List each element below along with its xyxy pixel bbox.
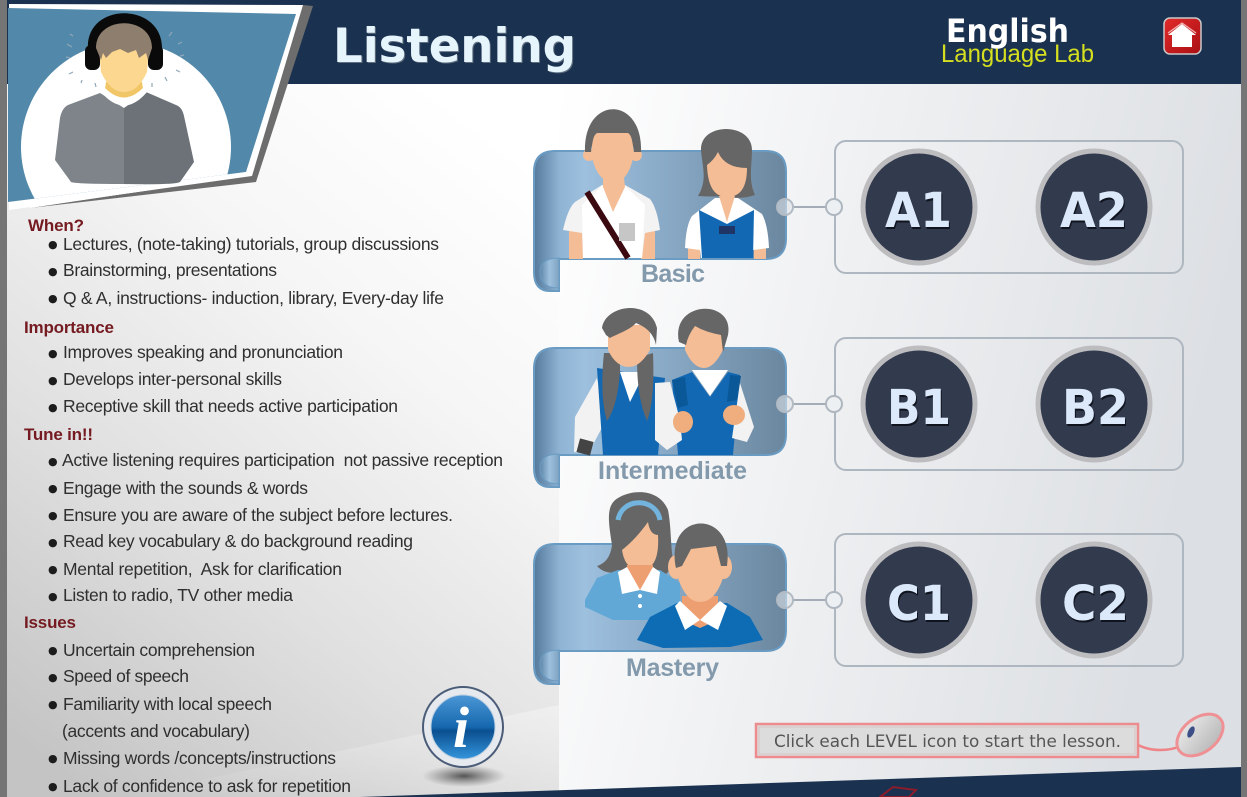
box: B levels	[826, 338, 1183, 470]
collar	[101, 88, 147, 106]
text block: when: Q & A, instructions- induction, library, Every-day life	[63, 288, 444, 308]
callout: click instruction: Click each LEVEL icon to start the lesson.	[774, 732, 1121, 752]
figure: girl	[574, 308, 665, 456]
panel: intermediate level	[534, 308, 1183, 487]
blue backdrop	[8, 8, 296, 202]
callout: click instruction	[756, 724, 1138, 757]
text block: importance	[24, 318, 398, 416]
label: Basic	[641, 260, 705, 288]
text block: tune in: Mental repetition, Ask for clarification	[63, 559, 342, 579]
torso	[55, 93, 124, 184]
box: A levels	[826, 141, 1183, 273]
logo: English Language Lab	[941, 12, 1094, 68]
text block: tune in: Tune in!!	[24, 425, 93, 444]
box: A levels: A1	[885, 183, 952, 239]
panel: mastery level	[534, 492, 1183, 684]
connector	[777, 396, 826, 412]
box: A levels: A2	[1060, 183, 1128, 239]
title: Listening	[333, 19, 576, 74]
text block: issues: ●	[48, 671, 58, 684]
text block: tune in: Active listening requires participation not passive reception	[62, 450, 503, 470]
label: Mastery	[626, 654, 719, 682]
text block: tune in: ●	[48, 590, 58, 603]
scroll banner	[534, 348, 786, 487]
footer bar	[360, 767, 1241, 797]
text block: when: Lectures, (note-taking) tutorials, group discussions	[63, 234, 439, 254]
box: C levels: C1	[887, 576, 951, 632]
text block: issues: Familiarity with local speech	[63, 694, 272, 714]
text block: issues: Uncertain comprehension	[63, 640, 255, 660]
text block: when: ●	[48, 238, 58, 251]
text block: issues	[24, 613, 351, 796]
panel: right levels area	[559, 83, 1241, 797]
text block: tune in: Read key vocabulary & do background reading	[63, 531, 413, 551]
text block: importance: Receptive skill that needs active participation	[63, 396, 398, 416]
connector	[777, 199, 826, 215]
text block: issues: Lack of confidence to ask for repetition	[63, 776, 351, 796]
text block: tune in: ●	[48, 563, 58, 576]
box: B levels: B2	[1062, 380, 1129, 436]
text block: tune in: ●	[48, 482, 58, 495]
figure: boy	[563, 109, 660, 259]
text block: when: ●	[48, 265, 58, 278]
text block: tune in: Engage with the sounds & words	[63, 478, 308, 498]
text block: when: When?	[28, 216, 84, 235]
text block: importance: ●	[48, 401, 58, 414]
face	[99, 48, 149, 92]
logo: English Language Lab: English	[946, 12, 1069, 50]
text block: issues: Speed of speech	[63, 666, 189, 686]
icon: info button: i	[453, 695, 469, 760]
text block: issues: Missing words /concepts/instructions	[63, 748, 336, 768]
text block: issues: ●	[48, 698, 58, 711]
text block: tune in	[24, 425, 503, 605]
illustration: listener portrait	[8, 4, 313, 210]
hair	[96, 23, 152, 60]
frame	[9, 4, 303, 210]
header bar	[7, 0, 1241, 84]
panel: left text area	[7, 80, 560, 797]
text block: issues: ●	[48, 752, 58, 765]
icon: info button	[422, 687, 506, 787]
figure: boy	[672, 309, 754, 455]
text block: when	[28, 216, 444, 308]
text block: importance: ●	[48, 347, 58, 360]
sound marks	[66, 32, 184, 87]
logo: English Language Lab: Language Lab	[941, 40, 1094, 68]
box: B levels: B1	[887, 380, 951, 436]
text block: issues: ●	[48, 780, 58, 793]
text block: tune in: Listen to radio, TV other media	[63, 585, 293, 605]
box: C levels	[826, 534, 1183, 666]
neck	[105, 82, 143, 98]
figure: girl's forearm and hand	[655, 382, 693, 450]
connector	[777, 592, 826, 608]
text block: when: ●	[48, 292, 58, 305]
text block: issues: Issues	[24, 613, 76, 632]
text block: issues: (accents and vocabulary)	[62, 721, 250, 741]
figure: woman	[585, 492, 680, 620]
text block: tune in: ●	[48, 455, 58, 468]
white circle	[21, 48, 231, 198]
text block: importance: Importance	[24, 318, 114, 337]
text block: tune in: ●	[48, 536, 58, 549]
icon: home button	[1164, 18, 1201, 54]
label: Intermediate	[598, 457, 747, 485]
panel: basic level	[534, 109, 1183, 291]
headphones	[88, 13, 162, 50]
icon: mouse with cable	[1138, 706, 1231, 764]
box: C levels: C2	[1062, 576, 1129, 632]
scroll banner	[534, 544, 786, 684]
scroll banner	[534, 151, 786, 291]
icon: footer arrow fragment	[880, 787, 916, 797]
text block: tune in: Ensure you are aware of the subject before lectures.	[63, 505, 453, 525]
text block: issues: ●	[48, 644, 58, 657]
text block: importance: Improves speaking and pronunciation	[63, 342, 343, 362]
figure: girl	[685, 129, 769, 259]
text block: importance: ●	[48, 374, 58, 387]
text block: importance: Develops inter-personal skills	[63, 369, 282, 389]
text block: tune in: ●	[48, 509, 58, 522]
text block: when: Brainstorming, presentations	[63, 260, 277, 280]
figure: man	[637, 523, 763, 648]
frame shadow	[30, 5, 313, 208]
